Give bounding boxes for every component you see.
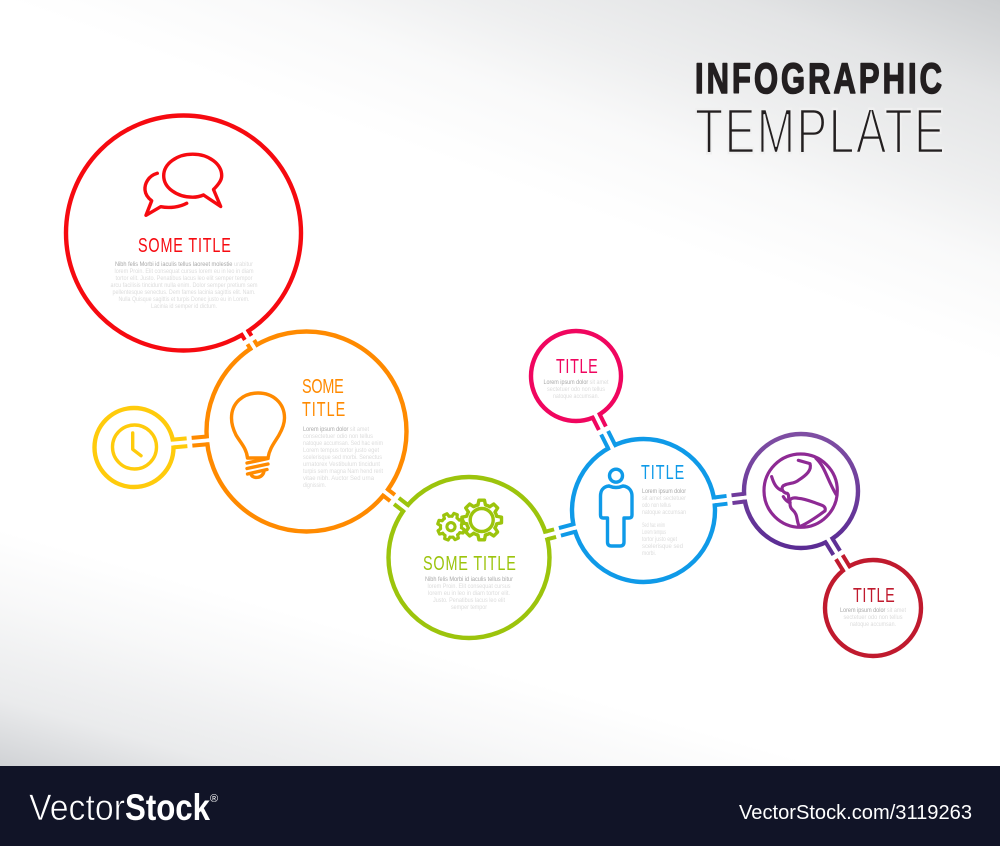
- orange body text: [303, 426, 383, 489]
- panel: orange circle: [206, 332, 406, 532]
- red body text: Lacinia id semper id dictum.: [151, 303, 217, 310]
- blue body text: natoque accumsan: [642, 509, 686, 516]
- orange body text: scelerisque sed morbi. Senectus: [303, 454, 382, 461]
- orange body text: urnatorex Vestibulum tincidunt: [303, 461, 380, 468]
- blue ring: [572, 439, 715, 582]
- dark red body text: sectetuer odo non tellus: [844, 614, 902, 621]
- orange body text: vitae nibh. Auctor Sed urna: [303, 475, 375, 482]
- orange body text: dignissim.: [303, 482, 326, 489]
- icon: light bulb: [232, 393, 284, 477]
- orange body text: turpis sem magna Nam hend rerit: [303, 468, 383, 475]
- blue body text: sit amet sectetuer: [642, 495, 686, 502]
- dark red heading: TITLE: [853, 584, 895, 607]
- icon: gears: [434, 500, 502, 544]
- panel: purple globe circle: [744, 434, 858, 548]
- green body text: lorem Proin. Elit consequat cursus: [428, 583, 510, 590]
- connector: pink to blue: [591, 410, 616, 451]
- connector: orange to green: [379, 486, 413, 515]
- icon: globe: [764, 454, 837, 527]
- blue body text: tortor justo eget: [642, 536, 677, 543]
- blue body text: [642, 488, 686, 557]
- purple ring: [744, 434, 858, 548]
- green body text: Justo. Penatibus lacus leo elit: [433, 597, 505, 604]
- orange body text: consectetuer odio non tellus: [303, 433, 373, 440]
- red body text: Nibh felis Morbi id iaculis tellus laoreet molestie urabitur: [115, 261, 253, 268]
- connector: blue to purple: [710, 493, 749, 506]
- green ring: [388, 477, 550, 638]
- orange heading: SOME: [302, 375, 344, 398]
- red body text: Nulla Quisque sagittis et turpis Donec justo eu in Lorem.: [118, 296, 250, 303]
- title line: INFOGRAPHIC: INFOGRAPHIC: [695, 54, 942, 102]
- panel: dark red circle: [825, 560, 921, 656]
- connector: green to blue: [541, 523, 579, 540]
- green body text: lorem eu in leo in diam tortor elit.: [428, 590, 510, 597]
- pink body text: sectetuer odo non tellus: [547, 386, 605, 393]
- red body text: [110, 261, 258, 310]
- blue body text: Lorem tempus: [642, 529, 666, 536]
- panel: green circle: [388, 477, 550, 638]
- connector: red to orange: [238, 325, 261, 355]
- green body text: Nibh felis Morbi id iaculis tellus bitur: [425, 576, 513, 583]
- orange heading: [302, 375, 345, 421]
- blue body text: Lorem ipsum dolor: [642, 488, 686, 495]
- connector: purple to dark red: [824, 535, 852, 575]
- blue body text: morbi.: [642, 550, 656, 557]
- dark red body text: Lorem ipsum dolor sit amet: [840, 607, 906, 614]
- icon: clock: [112, 425, 156, 469]
- red body text: pellentesque senectus. Dem fames lacinia sagittis elit. Nam.: [112, 289, 256, 296]
- blue body text: Sed hac enim: [642, 522, 665, 529]
- blue body text: odo non tellus: [642, 502, 671, 509]
- footer bar: [0, 766, 1000, 846]
- footer logo: Vector: [29, 787, 125, 828]
- orange ring: [206, 332, 406, 532]
- panel: blue circle: [572, 439, 715, 582]
- dark red ring: [825, 560, 921, 656]
- yellow ring: [94, 408, 174, 487]
- green heading: SOME TITLE: [423, 552, 516, 575]
- red ring: [66, 116, 301, 350]
- icon: speech bubbles: [145, 154, 222, 215]
- panel: pink circle: [531, 331, 621, 421]
- blue body text: scelerisque sed: [642, 543, 684, 550]
- orange body text: natoque accumsan. Sed hac enim: [303, 440, 383, 447]
- red body text: lorem Proin. Elit consequat cursus lorem eu in leo in diam: [114, 268, 254, 275]
- pink body text: [544, 379, 609, 400]
- connector: yellow to orange: [168, 436, 211, 448]
- footer logo: [29, 787, 218, 828]
- orange body text: Lorem tempus tortor justo eget: [303, 447, 379, 454]
- title line: TEMPLATE: TEMPLATE: [695, 96, 945, 167]
- pink heading: TITLE: [556, 355, 598, 378]
- orange body text: Lorem ipsum dolor sit amet: [303, 426, 369, 433]
- orange heading: TITLE: [302, 398, 345, 421]
- green body text: semper tempor: [451, 604, 487, 611]
- pink body text: natoque accumsan.: [553, 393, 599, 400]
- blue heading: TITLE: [641, 461, 684, 484]
- red heading: SOME TITLE: [138, 234, 231, 257]
- icon: person: [600, 469, 632, 546]
- footer url: VectorStock.com/3119263: [739, 801, 972, 824]
- pink body text: Lorem ipsum dolor sit amet: [544, 379, 609, 386]
- red body text: tortor elit. Justo. Penatibus lacus leo elit semper tempor: [116, 275, 252, 282]
- green body text: [425, 576, 513, 611]
- dark red body text: [840, 607, 906, 628]
- title: infographic template: [695, 54, 945, 167]
- panel: yellow clock circle: [94, 408, 174, 487]
- dark red body text: natoque accumsan.: [850, 621, 896, 628]
- footer logo: Stock: [125, 787, 210, 828]
- footer logo: ®: [210, 793, 218, 805]
- pink ring: [531, 331, 621, 421]
- panel: red circle: [66, 116, 301, 350]
- red body text: arcu facilisis tincidunt nulla enim. Dolor semper pretium sem: [110, 282, 258, 289]
